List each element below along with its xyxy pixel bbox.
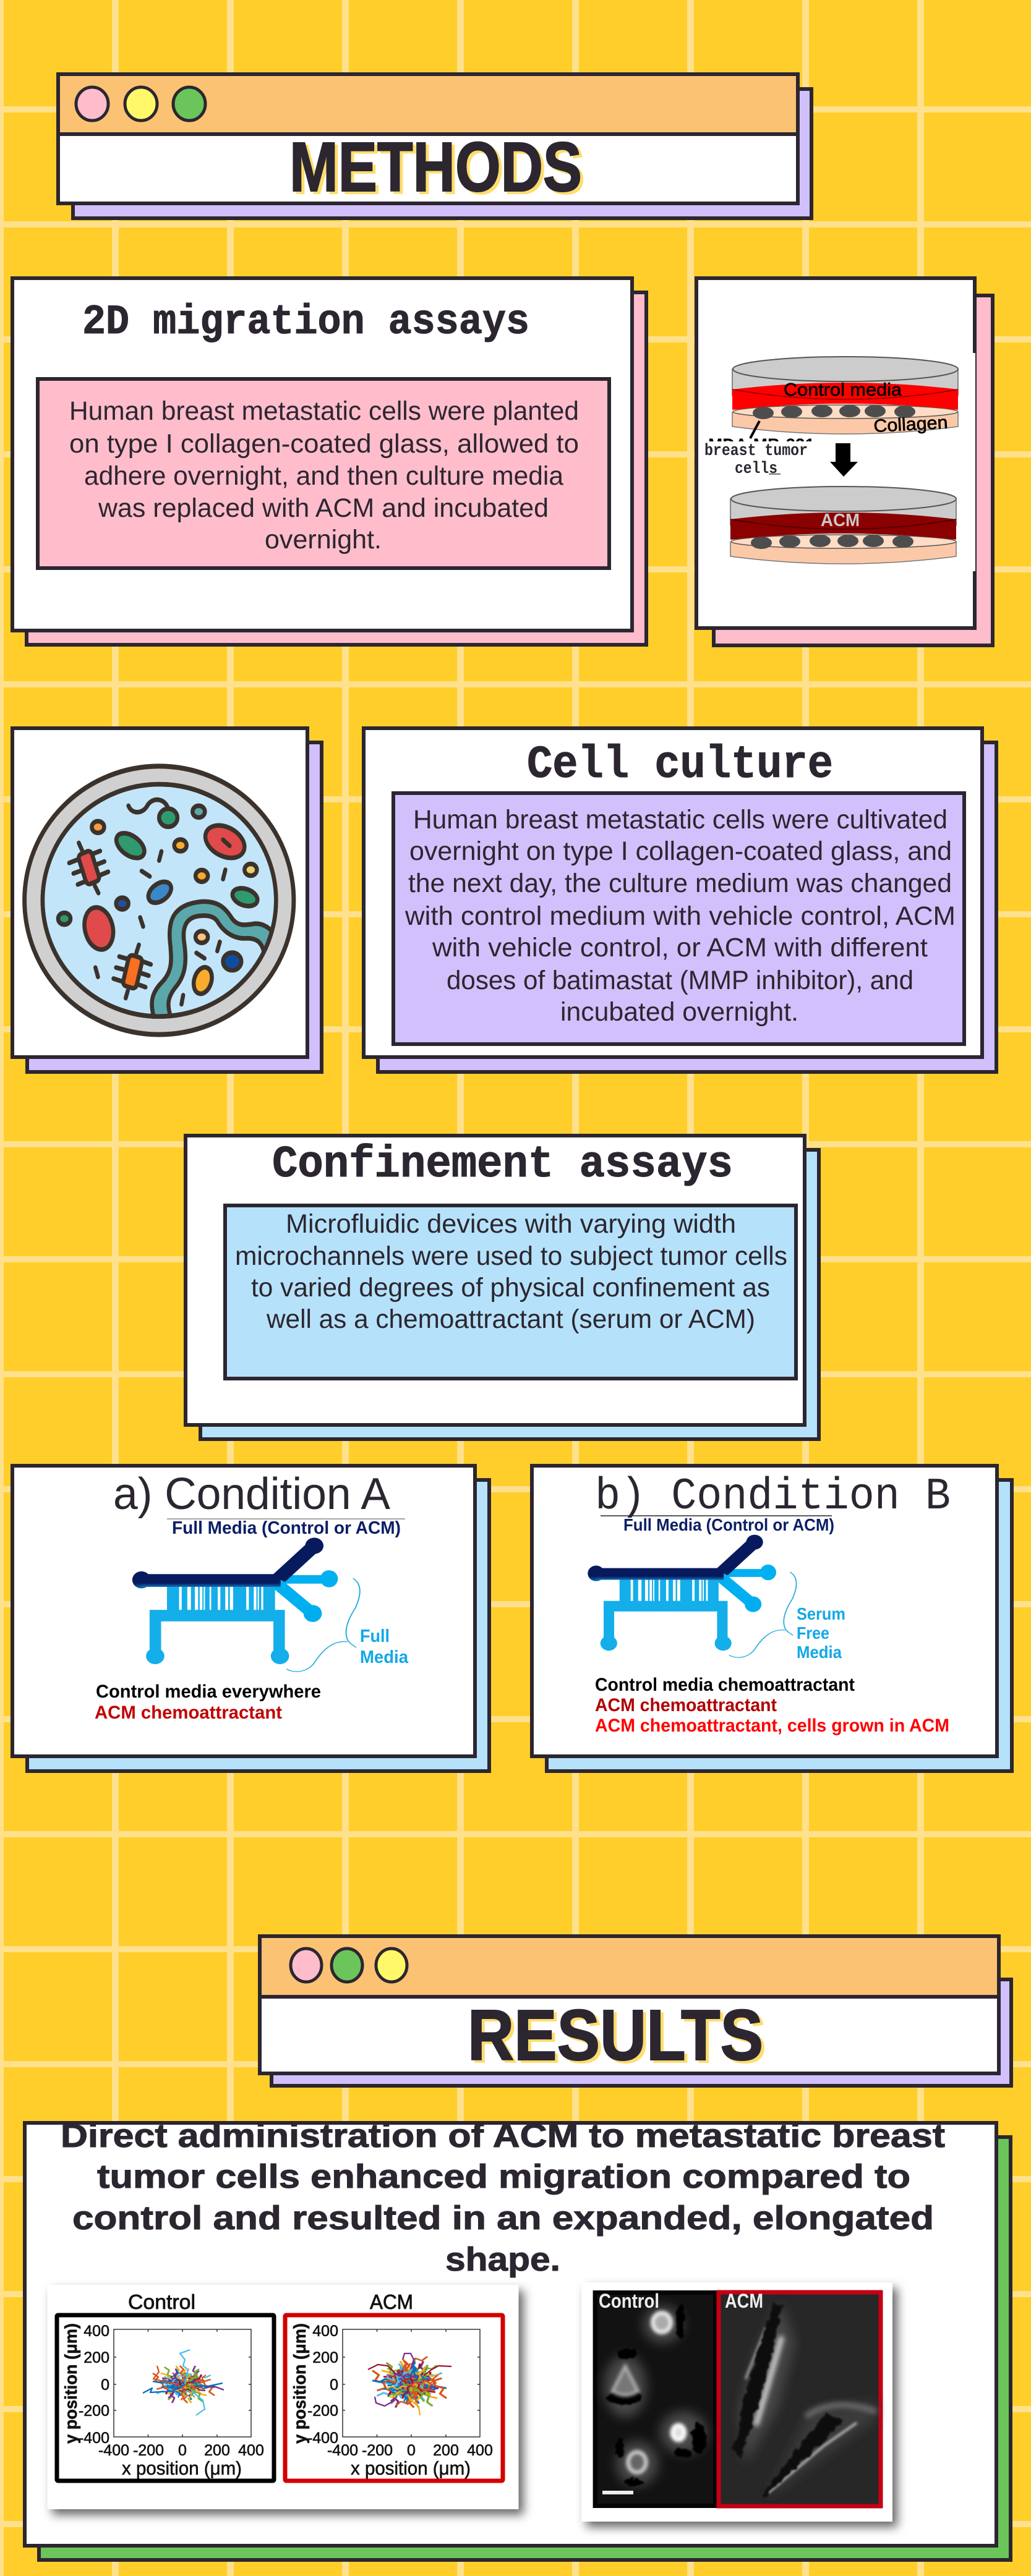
text box: cell culture description: with control medium with vehicle control, ACM bbox=[404, 901, 956, 931]
dish: control media: Collagen bbox=[873, 413, 948, 436]
heading: 2D migration assays: 2D migration assays bbox=[82, 299, 529, 346]
text box: 2D migration description: overnight. bbox=[265, 525, 382, 555]
chart: ACM tracks: -400 bbox=[307, 2429, 338, 2447]
chart: control tracks: -400 bbox=[79, 2429, 109, 2447]
text box: 2D migration description: Human breast metastatic cells were planted bbox=[69, 396, 579, 426]
chart: control tracks: 0 bbox=[178, 2442, 187, 2459]
text box: 2D migration description bbox=[38, 379, 609, 568]
chart: control tracks: x position (μm) bbox=[122, 2457, 242, 2479]
panel: condition B bbox=[532, 1466, 1012, 1771]
panel: petri dish illustration bbox=[12, 728, 322, 1072]
legend: condition B: ACM chemoattractant, cells grown in ACM bbox=[595, 1715, 949, 1736]
heading: direct administration finding bbox=[61, 2117, 945, 2278]
panel: cell culture bbox=[364, 728, 996, 1072]
text box: cell culture description bbox=[393, 793, 964, 1044]
dish: control media: Control media bbox=[784, 380, 902, 400]
heading: METHODS: METHODS bbox=[289, 128, 582, 206]
chart: ACM tracks bbox=[285, 2290, 503, 2481]
diagram: microfluidic device B: Full Media (Control or ACM) bbox=[623, 1515, 834, 1534]
micrograph: control cells bbox=[593, 2290, 717, 2508]
window title bar bbox=[260, 1936, 999, 1997]
dish: ACM bbox=[730, 487, 956, 564]
diagram: microfluidic device A: Full bbox=[360, 1626, 390, 1646]
heading: direct administration finding: tumor cells enhanced migration compared to bbox=[97, 2158, 910, 2195]
figure: cell track plots bbox=[47, 2285, 518, 2509]
micrograph: control cells: Control bbox=[599, 2290, 659, 2312]
arrow: down bbox=[830, 443, 858, 477]
chart: ACM tracks: x position (μm) bbox=[351, 2457, 471, 2479]
legend: condition A bbox=[95, 1681, 321, 1723]
text box: confinement description bbox=[225, 1205, 796, 1379]
heading: direct administration finding: control and resulted in an expanded, elongated bbox=[72, 2200, 934, 2237]
heading: direct administration finding: shape. bbox=[445, 2241, 560, 2278]
label: breast tumor cells: breast tumor bbox=[704, 442, 808, 461]
chart: ACM tracks: ACM bbox=[370, 2290, 413, 2313]
text box: confinement description: well as a chemoattractant (serum or ACM) bbox=[266, 1304, 755, 1334]
diagram: microfluidic device B bbox=[588, 1515, 845, 1662]
heading: confinement assays: Confinement assays bbox=[272, 1139, 733, 1190]
text box: cell culture description: doses of batimastat (MMP inhibitor), and bbox=[447, 966, 913, 995]
panel: condition A bbox=[12, 1466, 489, 1771]
heading: RESULTS: RESULTS bbox=[471, 1997, 766, 2078]
chart: ACM tracks: 200 bbox=[312, 2349, 338, 2366]
chart: control tracks: -200 bbox=[79, 2402, 109, 2420]
text box: 2D migration description: was replaced with ACM and incubated bbox=[98, 493, 549, 523]
text box: confinement description: Microfluidic devices with varying width bbox=[286, 1209, 736, 1239]
diagram: microfluidic device A: Full Media (Control or ACM) bbox=[172, 1518, 401, 1538]
legend: condition B: ACM chemoattractant bbox=[595, 1695, 777, 1715]
text box: cell culture description: Human breast metastatic cells were cultivated bbox=[413, 805, 948, 835]
panel: results header bbox=[260, 1936, 1011, 2086]
chart: control tracks: 200 bbox=[83, 2349, 109, 2366]
diagram: microfluidic device B: Free bbox=[797, 1623, 829, 1643]
panel: culture dish diagram bbox=[696, 278, 993, 645]
legend: condition B bbox=[595, 1675, 949, 1736]
chart: control tracks: 0 bbox=[101, 2376, 109, 2394]
heading: cell culture: Cell culture bbox=[527, 739, 833, 791]
chart: control tracks bbox=[57, 2290, 274, 2481]
chart: ACM tracks: y position (μm) bbox=[290, 2323, 309, 2444]
chart: ACM tracks: -400 bbox=[327, 2442, 358, 2459]
diagram: microfluidic device A: Media bbox=[360, 1647, 409, 1667]
label: breast tumor cells bbox=[705, 438, 811, 475]
text box: 2D migration description: on type I collagen-coated glass, allowed to bbox=[69, 429, 579, 459]
legend: condition A: ACM chemoattractant bbox=[95, 1702, 282, 1723]
panel: results content bbox=[25, 2117, 1011, 2560]
panel: confinement assays bbox=[186, 1136, 819, 1439]
chart: control tracks: 200 bbox=[204, 2442, 230, 2459]
chart: control tracks: -400 bbox=[98, 2442, 129, 2459]
icon: petri dish bbox=[25, 766, 294, 1035]
text box: confinement description: microchannels were used to subject tumor cells bbox=[235, 1241, 787, 1271]
legend: condition A: Control media everywhere bbox=[96, 1681, 321, 1702]
chart: control tracks: -200 bbox=[133, 2442, 164, 2459]
heading: condition A: a) Condition A bbox=[113, 1469, 390, 1519]
heading: direct administration finding: Direct administration of ACM to metastatic breast bbox=[61, 2117, 945, 2154]
diagram: microfluidic device B: Serum bbox=[797, 1604, 845, 1623]
text box: cell culture description: with vehicle control, or ACM with different bbox=[432, 933, 928, 963]
chart: ACM tracks: 200 bbox=[433, 2442, 459, 2459]
dish: control media bbox=[732, 357, 958, 438]
text box: cell culture description: incubated overnight. bbox=[560, 997, 798, 1027]
window buttons bbox=[76, 87, 205, 121]
heading: METHODS: METHODS bbox=[293, 130, 585, 208]
dish: ACM: ACM bbox=[821, 511, 860, 530]
chart: ACM tracks: -200 bbox=[307, 2402, 338, 2420]
heading: RESULTS: RESULTS bbox=[468, 1995, 763, 2075]
text box: 2D migration description: adhere overnight, and then culture media bbox=[84, 461, 563, 491]
chart: ACM tracks: 400 bbox=[312, 2323, 338, 2340]
micrograph: ACM cells: ACM bbox=[725, 2290, 763, 2312]
micrograph: ACM cells bbox=[719, 2290, 881, 2506]
text box: cell culture description: the next day, the culture medium was changed bbox=[408, 869, 952, 898]
chart: ACM tracks: 0 bbox=[330, 2376, 338, 2394]
diagram: microfluidic device A bbox=[132, 1518, 409, 1672]
diagram: microfluidic device B: Media bbox=[797, 1643, 842, 1662]
window title bar bbox=[58, 74, 798, 134]
window buttons bbox=[291, 1949, 407, 1982]
text box: cell culture description: overnight on type I collagen-coated glass, and bbox=[409, 836, 952, 866]
heading: condition B: b) Condition B bbox=[595, 1471, 951, 1522]
chart: ACM tracks: 0 bbox=[407, 2442, 416, 2459]
panel: 2D migration assays bbox=[12, 278, 646, 645]
text box: confinement description: to varied degrees of physical confinement as bbox=[251, 1273, 770, 1303]
panel: methods header bbox=[58, 74, 811, 218]
chart: ACM tracks: 400 bbox=[467, 2442, 493, 2459]
chart: control tracks: Control bbox=[128, 2290, 195, 2313]
label: breast tumor cells: MDA-MB-231 bbox=[708, 435, 815, 456]
chart: control tracks: y position (μm) bbox=[61, 2323, 80, 2444]
chart: control tracks: 400 bbox=[238, 2442, 264, 2459]
label: breast tumor cells: cells bbox=[735, 460, 777, 478]
figure: phase contrast micrographs bbox=[581, 2282, 892, 2522]
legend: condition B: Control media chemoattractant bbox=[595, 1675, 855, 1695]
chart: ACM tracks: -200 bbox=[362, 2442, 393, 2459]
chart: control tracks: 400 bbox=[83, 2323, 109, 2340]
